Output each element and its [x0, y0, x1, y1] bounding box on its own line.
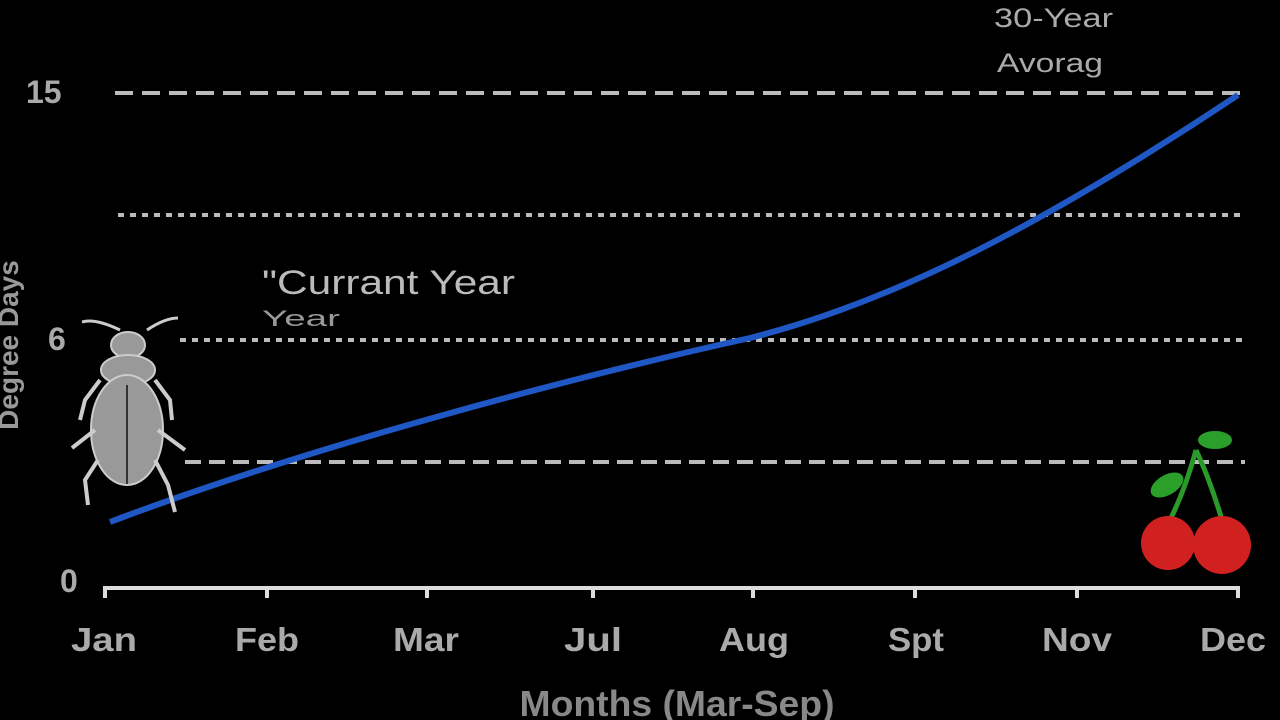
- labels: "Currant Year: [262, 264, 515, 302]
- y labels: [26, 74, 78, 599]
- x labels: Dec: [1200, 621, 1266, 658]
- chart: Year: [262, 306, 340, 331]
- x labels: Nov: [1042, 621, 1113, 658]
- x labels: Feb: [235, 621, 299, 658]
- chart: Avorag: [997, 48, 1103, 78]
- x labels: Spt: [888, 621, 944, 658]
- icon: beetle: [72, 318, 185, 512]
- y labels: 15: [26, 74, 62, 110]
- x axis: [103, 588, 1240, 598]
- x labels: [71, 621, 1266, 658]
- icon: cherries: [1141, 431, 1251, 574]
- x labels: Mar: [393, 621, 459, 658]
- blue line: [110, 95, 1238, 522]
- chart: 30-Year: [994, 3, 1113, 33]
- y labels: 6: [48, 321, 66, 357]
- x labels: Aug: [719, 621, 789, 658]
- x labels: Jul: [564, 621, 622, 658]
- x labels: Jan: [71, 621, 137, 658]
- y labels: 0: [60, 563, 78, 599]
